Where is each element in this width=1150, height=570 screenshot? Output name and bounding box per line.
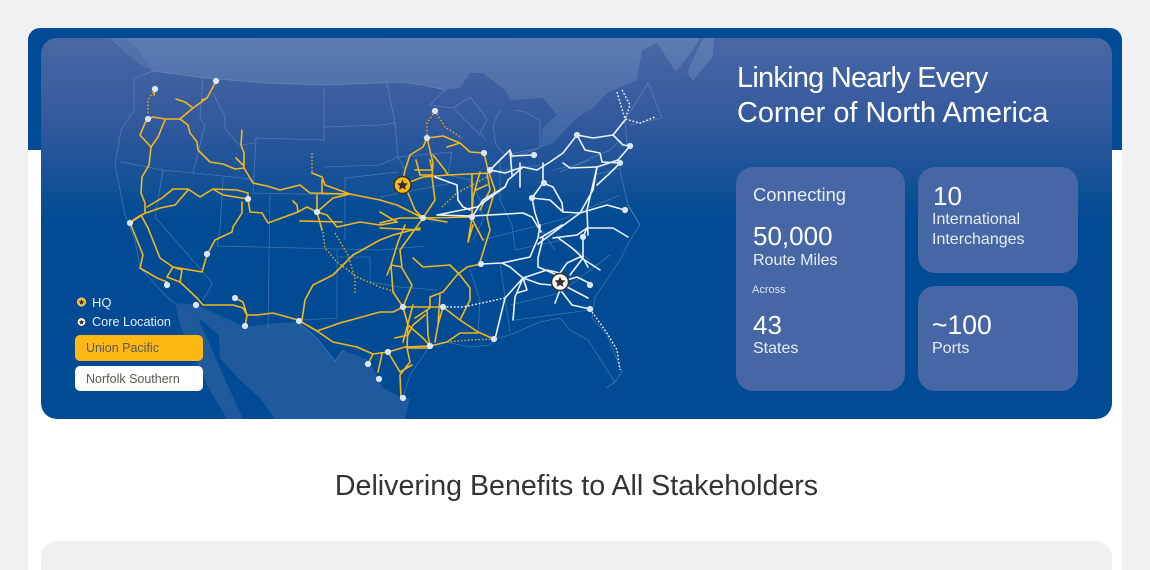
stat: interchanges label — [932, 211, 1025, 248]
nova scotia — [687, 38, 714, 81]
stat: ports label: Ports — [932, 340, 969, 357]
text: across: Across — [752, 284, 786, 296]
legend: Norfolk Southern: Norfolk Southern — [86, 372, 180, 386]
stat: interchanges label: International — [932, 211, 1020, 228]
heading: stakeholders: Delivering Benefits to All Stakeholders — [335, 470, 818, 502]
panel: network map hero — [41, 38, 1112, 419]
stat card: connecting — [736, 167, 905, 391]
legend: Norfolk Southern — [75, 366, 203, 391]
stat: ports number: ~100 — [932, 310, 992, 340]
stat card: ports — [918, 286, 1078, 391]
stat: interchanges label: Interchanges — [932, 231, 1025, 248]
stat: interchanges number: 10 — [933, 181, 962, 211]
legend: Union Pacific: Union Pacific — [86, 341, 159, 355]
title — [737, 62, 1048, 129]
icon: legend HQ — [77, 298, 86, 306]
legend: Union Pacific — [75, 335, 203, 361]
norfolk southern rail lines — [435, 120, 630, 339]
canada landmass — [110, 38, 700, 148]
stat: route miles number: 50,000 — [753, 221, 833, 251]
norfolk southern proposed routes (dotted) — [443, 90, 655, 370]
union pacific proposed routes (dotted) — [148, 89, 494, 342]
legend label: HQ: HQ — [92, 295, 112, 310]
stat: states number: 43 — [753, 310, 782, 340]
stat: states label: States — [753, 340, 798, 357]
title: Linking Nearly Every — [737, 62, 988, 94]
icon: union pacific HQ star — [394, 176, 411, 194]
union pacific rail lines — [130, 81, 495, 398]
vancouver island — [112, 38, 152, 70]
title: Corner of North America — [737, 97, 1048, 129]
core location nodes — [127, 78, 633, 401]
icon: legend core location — [77, 318, 86, 326]
stat card: interchanges — [918, 167, 1078, 273]
lower grey panel — [41, 541, 1112, 570]
mexico landmass — [175, 303, 410, 419]
icon: norfolk southern HQ star — [552, 274, 568, 290]
gulf of california — [198, 318, 275, 419]
state boundaries — [115, 71, 662, 398]
stat: route miles label: Route Miles — [753, 252, 837, 269]
text: connecting: Connecting — [753, 184, 846, 205]
legend label: Core Location: Core Location — [92, 315, 171, 329]
